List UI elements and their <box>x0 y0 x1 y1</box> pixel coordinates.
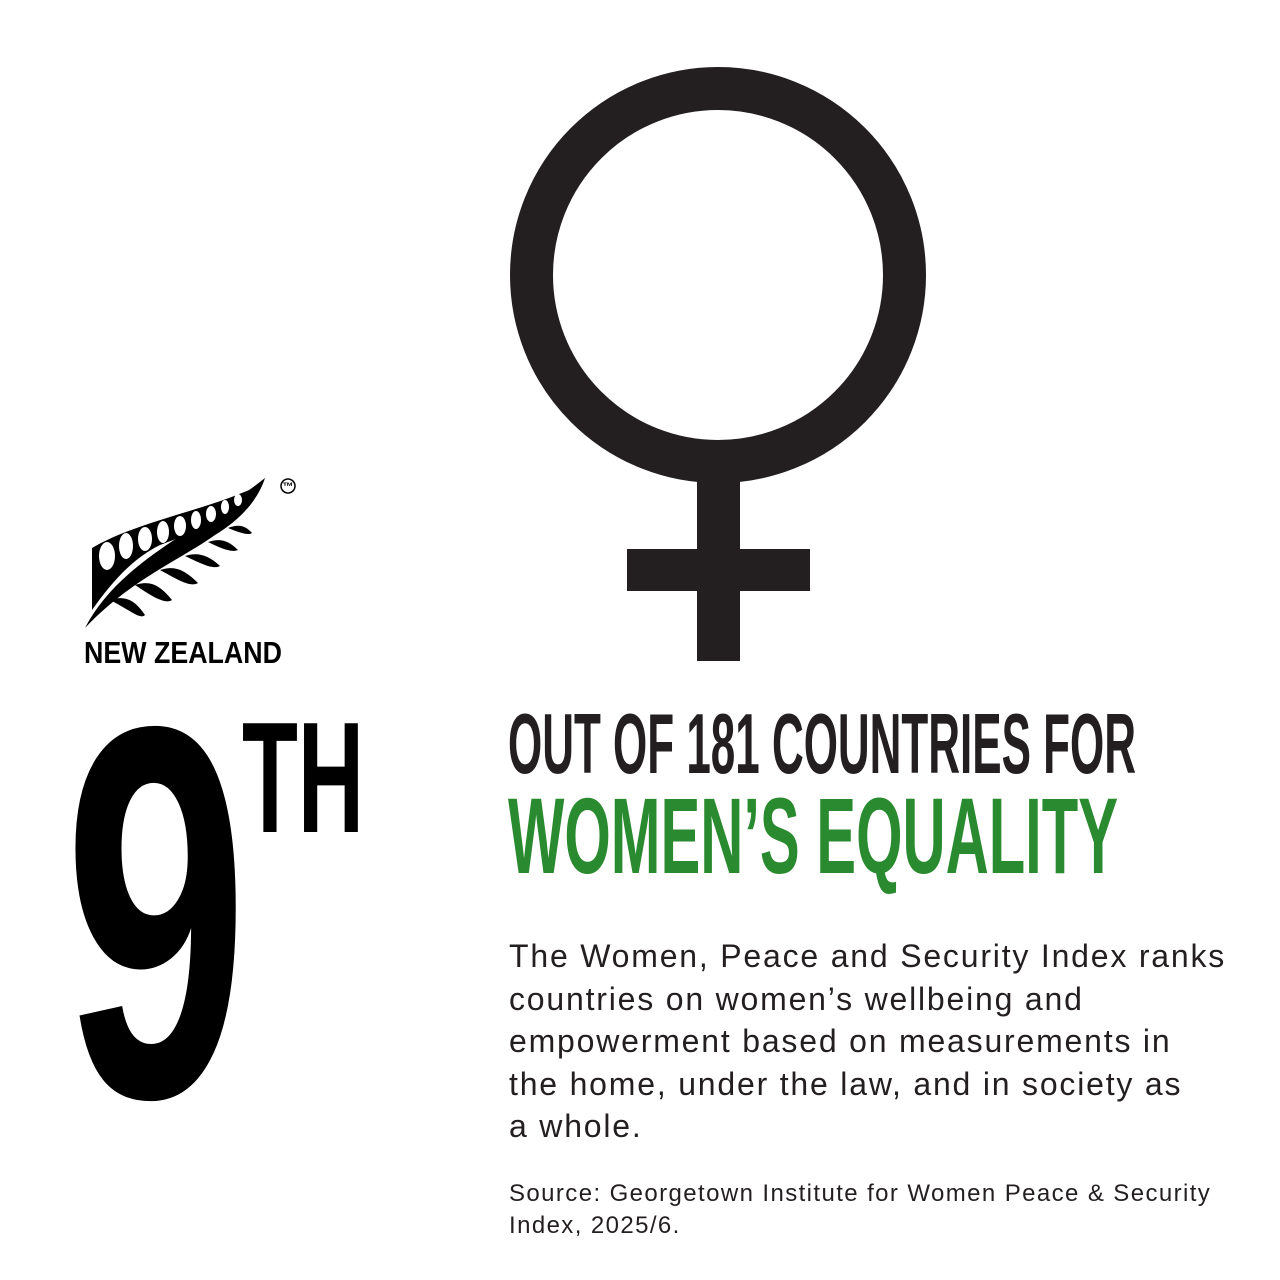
source <box>509 1180 1211 1239</box>
body text <box>509 938 1226 1144</box>
logo: New Zealand fern: ™ <box>282 481 294 493</box>
source: Index, 2025/6. <box>509 1212 681 1239</box>
body text: the home, under the law, and in society as <box>509 1066 1182 1102</box>
heading <box>508 697 1136 896</box>
source: Source: Georgetown Institute for Women Peace & Security <box>509 1180 1211 1207</box>
body text: a whole. <box>509 1108 643 1144</box>
logo: New Zealand fern <box>84 478 296 670</box>
body text: empowerment based on measurements in <box>509 1023 1171 1059</box>
body text: countries on women’s wellbeing and <box>509 980 1084 1016</box>
body text: The Women, Peace and Security Index ranks <box>509 938 1226 974</box>
logo: New Zealand fern: NEW ZEALAND <box>84 635 282 670</box>
